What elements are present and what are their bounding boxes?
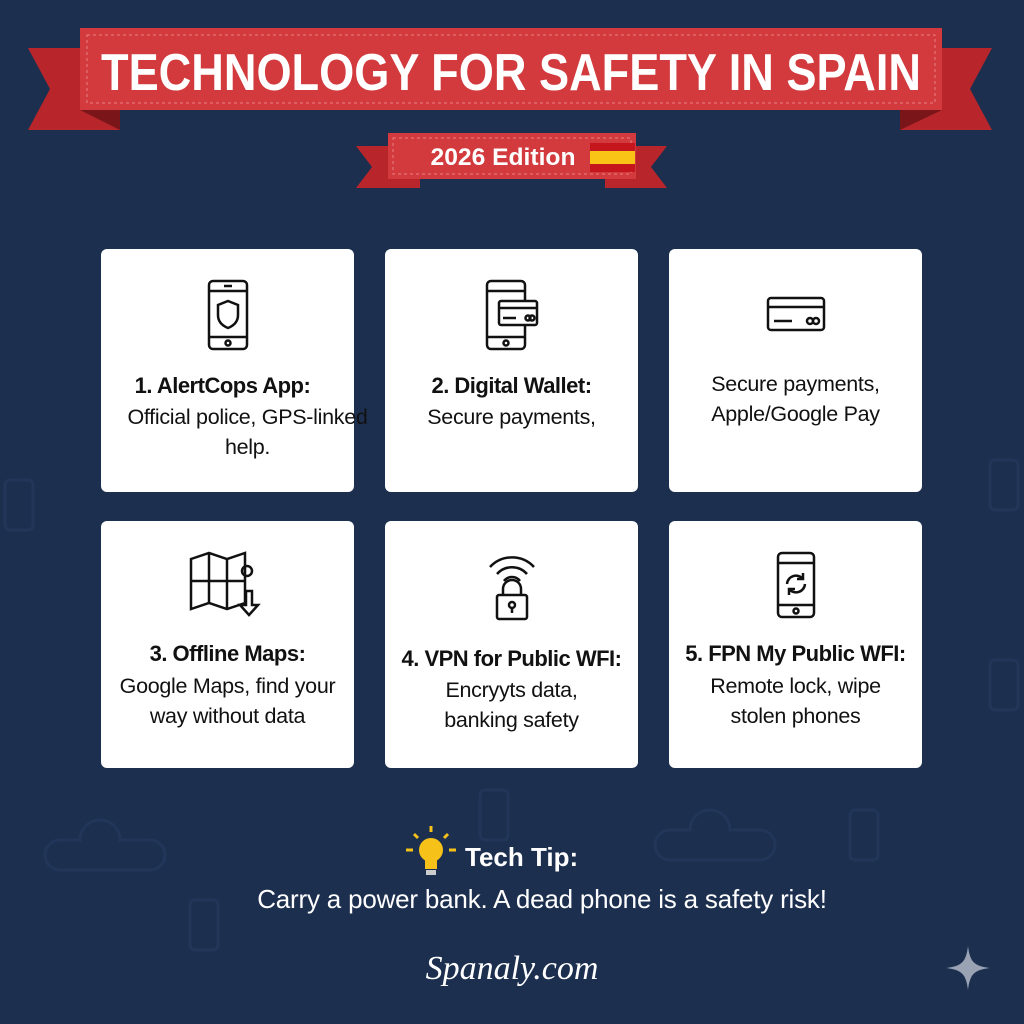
card 3 [669, 249, 922, 492]
icon: phone sync [776, 552, 816, 618]
card 2: 2. Digital Wallet: [431, 373, 592, 398]
card 4: 3. Offline Maps: [150, 641, 305, 666]
icon: light bulb [406, 826, 456, 875]
card 4 [101, 521, 354, 768]
title: TECHNOLOGY FOR SAFETY IN SPAIN [101, 44, 921, 102]
tech tip [257, 826, 827, 914]
card 6: stolen phones [730, 704, 860, 728]
icon: credit card [766, 296, 826, 332]
card 6 [669, 521, 922, 768]
card 3: Secure payments, [711, 372, 880, 396]
icon: spain flag [590, 143, 635, 172]
subtitle: 2026 Edition [430, 144, 576, 171]
title ribbon [28, 28, 992, 188]
card 3: Apple/Google Pay [711, 402, 880, 426]
card 1: Official police, GPS-linked [127, 405, 368, 429]
icon: offline map [190, 551, 261, 617]
tip text: Carry a power bank. A dead phone is a safety risk! [257, 884, 827, 914]
card 2 [385, 249, 638, 492]
tip heading: Tech Tip: [465, 842, 578, 872]
card 6: Remote lock, wipe [710, 674, 881, 698]
card 5: 4. VPN for Public WFI: [401, 646, 622, 671]
card 6: 5. FPN My Public WFI: [685, 641, 906, 666]
icon: phone wallet [486, 280, 538, 350]
card 4: way without data [150, 704, 305, 728]
card 5 [385, 521, 638, 768]
icon: phone shield [208, 280, 248, 350]
card 2: Secure payments, [427, 405, 596, 429]
card 1: 1. AlertCops App: [135, 373, 310, 398]
card 1 [101, 249, 354, 492]
footer: brand: Spanaly.com [426, 950, 598, 987]
card 5: banking safety [444, 708, 579, 732]
icon: sparkle [946, 946, 990, 990]
card 4: Google Maps, find your [120, 674, 335, 698]
icon: wifi lock [489, 556, 535, 620]
card 1: help. [225, 435, 270, 459]
card 5: Encryyts data, [445, 678, 578, 702]
